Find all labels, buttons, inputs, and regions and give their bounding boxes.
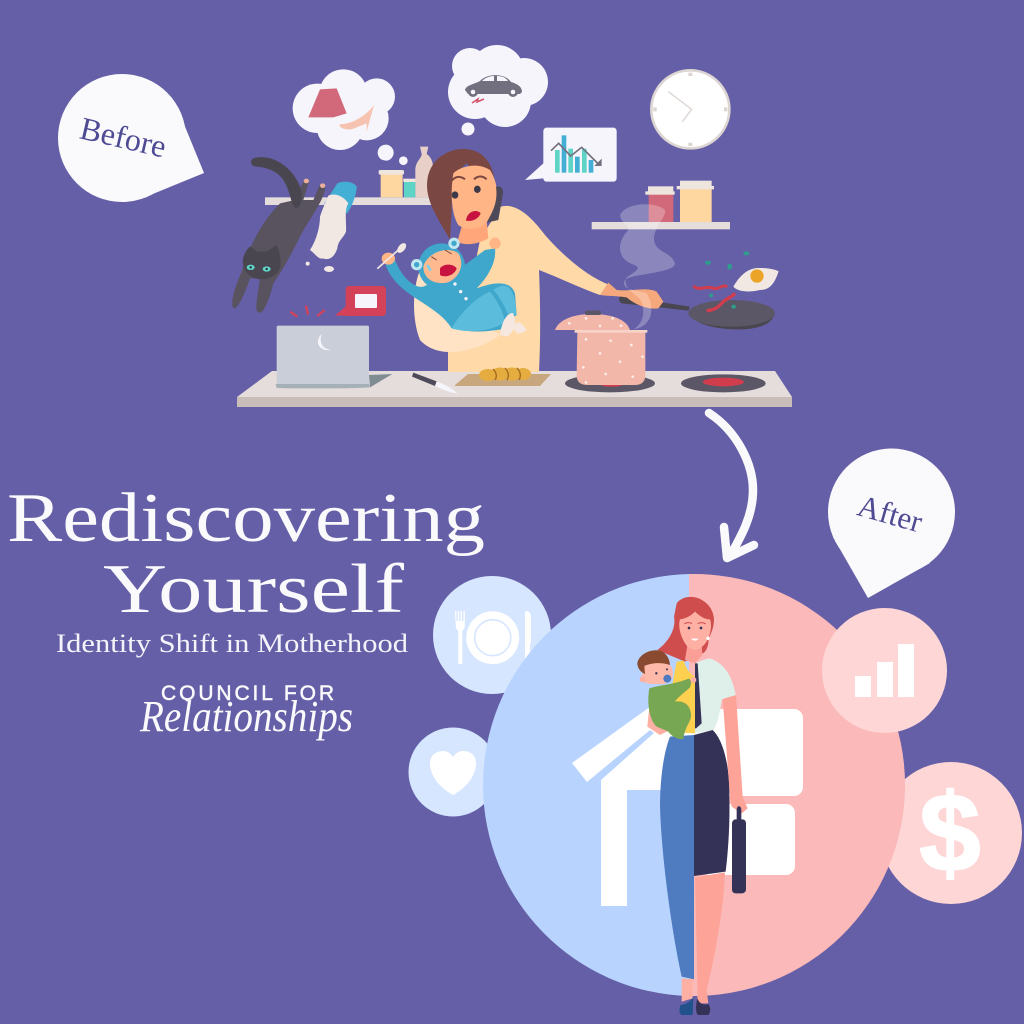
icon: thought cloud with car: [448, 45, 548, 136]
baby head: [640, 661, 673, 684]
facial features: [684, 623, 710, 641]
baby hair: [637, 650, 670, 674]
icon: falling chart speech bubble: [525, 128, 617, 182]
callout: Before: [58, 74, 204, 202]
frying pan with bacon and egg: [600, 251, 779, 329]
skirt half: [694, 730, 729, 876]
left ankle: [682, 978, 693, 1002]
face: [679, 612, 711, 650]
email notification: [290, 286, 386, 317]
steam: [620, 204, 675, 329]
callout: Before: Before: [77, 110, 170, 164]
left shoe: [679, 997, 693, 1015]
right burner: [681, 374, 766, 392]
central circle split blue and pink: [483, 574, 905, 996]
falling black cat: [232, 157, 325, 313]
mother head with brown hair: [427, 149, 503, 244]
arm behind baby: [647, 697, 670, 735]
yellow shirt half: [670, 661, 695, 733]
tie: [695, 663, 702, 728]
jeans half: [660, 735, 694, 979]
briefcase bottle shape: [732, 806, 746, 893]
spilled cup and milk: [306, 182, 357, 272]
icon: wall clock: [651, 70, 729, 148]
icon circle: bar chart: [822, 608, 947, 733]
callout: After: After: [854, 488, 927, 540]
mother body in cream sweater: [414, 206, 610, 372]
right leg: [695, 872, 725, 1003]
callout: After: [828, 448, 955, 598]
woman half casual half business holding baby: [637, 597, 748, 1015]
laptop: [276, 326, 392, 388]
neck and face: [685, 643, 702, 663]
icon circle: dollar: $: [919, 772, 981, 895]
title: Yourself: [103, 551, 405, 628]
subtitle: Identity Shift in Motherhood: [56, 629, 408, 658]
icon circle: dollar: [880, 762, 1022, 904]
logo: Council for Relationships: Relationships: [139, 692, 353, 741]
right arm: [723, 695, 748, 813]
pot with lid: [555, 311, 655, 392]
icon: home and office building: [572, 678, 803, 906]
right shoe: [696, 998, 710, 1015]
knife: [412, 373, 457, 393]
logo: Council for Relationships: COUNCIL FOR: [161, 682, 334, 705]
title: [7, 480, 485, 628]
hair: [657, 597, 714, 662]
baby body: [648, 679, 691, 739]
kitchen counter: [237, 371, 792, 407]
arrow: before to after: [709, 413, 754, 558]
cutting board with bread: [455, 368, 551, 386]
white shirt half: [695, 658, 736, 733]
title: Rediscovering: [7, 480, 485, 557]
icon circle: plate and cutlery: [433, 576, 551, 694]
crying baby in blue suit: [377, 238, 527, 337]
icon: thought cloud with skirt and shoe: [293, 69, 408, 165]
icon circle: heart: [408, 728, 498, 816]
baby face: [640, 668, 696, 683]
left shelf with jars: [265, 147, 433, 205]
right shelf with jars: [592, 181, 730, 229]
scene: overwhelmed mother in kitchen: [232, 45, 792, 407]
